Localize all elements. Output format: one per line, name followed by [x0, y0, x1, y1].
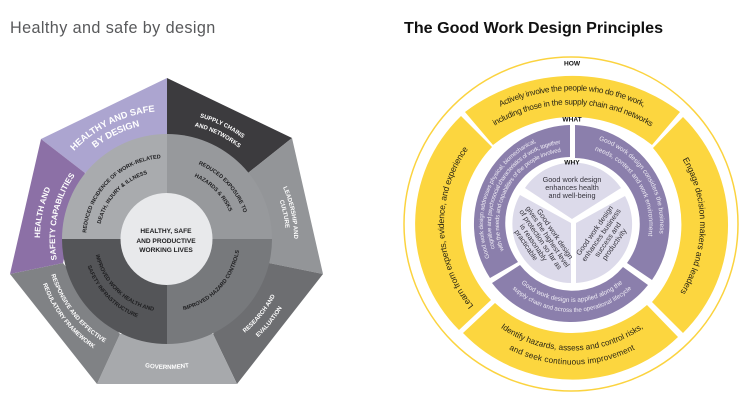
ring quadrant: improved work health and safety infrastructure: SAFETY INFRASTRUCTURE	[88, 265, 138, 318]
lilac sector: business success: productivity	[600, 226, 629, 262]
ring quadrant: improved hazard controls: IMPROVED HAZARD CONTROLS	[182, 250, 239, 310]
heptagon diagram: healthy and safe by design	[10, 78, 323, 384]
ring quadrant: improved hazard controls	[167, 239, 272, 344]
yellow segment: actively involve: including those in the supply chain and networks	[492, 98, 652, 126]
yellow segment: engage decision makers	[652, 117, 728, 333]
circular diagram: good work design principles	[403, 56, 739, 392]
lilac sector: highest level of protection: Good work design	[535, 207, 575, 261]
ring quadrant: reduced exposure: REDUCED EXPOSURE TO	[198, 161, 247, 212]
yellow segment: identify hazards: and seek continuous improvement	[510, 345, 635, 365]
label: why: WHY	[564, 160, 580, 166]
lilac sector: health and well-being	[525, 163, 621, 219]
yellow segment: learn from experts: Learn from experts, evidence, and experience	[438, 148, 474, 309]
lilac sector: highest level of protection: of protection so far as	[517, 208, 564, 271]
yellow segment: actively involve: Actively involve the people who do the work,	[500, 84, 644, 108]
ring quadrant: improved work health and safety infrastructure	[62, 239, 167, 344]
yellow segment: identify hazards: Identify hazards, assess and control risks,	[501, 324, 644, 350]
segment: research and evaluation	[213, 263, 323, 384]
purple segment: supply chain and lifecycle: Good work design is applied along the	[522, 280, 622, 303]
yellow segment: engage decision makers: Engage decision makers and leaders	[680, 157, 706, 294]
segment: healthy and safe by design: BY DESIGN	[92, 120, 140, 148]
segment: leadership and culture: LEADERSHIP AND	[283, 186, 298, 239]
lilac sector: highest level of protection: is reasonably	[518, 222, 550, 263]
segment: supply chains and networks: SUPPLY CHAINS	[200, 114, 244, 138]
ring quadrant: reduced incidence: DEATH, INJURY & ILLNESS	[97, 170, 147, 224]
lilac sector: highest level of protection: gives the highest level	[524, 204, 572, 269]
centre circle: healthy, safe and productive working lives: WORKING LIVES	[139, 247, 193, 254]
segment: supply chains and networks	[167, 78, 292, 173]
ring quadrant: reduced incidence	[62, 134, 167, 239]
centre circle: healthy, safe and productive working lives	[120, 193, 212, 285]
purple segment: business needs: Good work design considers the business	[600, 136, 665, 234]
yellow segment: identify hazards	[463, 303, 678, 380]
purple segment: supply chain and lifecycle	[492, 265, 648, 322]
segment: health and safety capabilities: SAFETY CAPABILITIES	[50, 173, 74, 260]
ring quadrant: improved work health and safety infrastructure: IMPROVED WORK HEALTH AND	[96, 254, 154, 310]
segment: leadership and culture	[248, 138, 323, 274]
lilac sector: health and well-being: and well-being	[548, 191, 596, 200]
lilac sector: business success	[573, 196, 636, 283]
purple segment: physical and psychosocial: cognitive and psychosocial characteristics of work, together	[486, 140, 560, 249]
title: The Good Work Design Principles: The Good Work Design Principles	[404, 19, 663, 37]
purple segment: business needs	[575, 125, 670, 280]
ring quadrant: reduced incidence: REDUCED INCIDENCE OF WORK-RELATED	[82, 154, 160, 232]
ring quadrant: reduced exposure	[167, 134, 264, 239]
lilac sector: business success: enhances business	[580, 207, 623, 263]
segment: healthy and safe by design	[41, 78, 167, 173]
segment: health and safety capabilities: HEALTH AND	[34, 187, 50, 238]
ring quadrant: reduced exposure: HAZARDS & RISKS	[194, 173, 232, 212]
purple segment: physical and psychosocial: Good work design addresses physical, biomechanical,	[478, 139, 536, 258]
yellow segment: actively involve	[465, 76, 680, 145]
segment: leadership and culture: CULTURE	[280, 200, 290, 228]
purple segment: physical and psychosocial	[474, 125, 570, 278]
segment: health and safety capabilities	[10, 139, 85, 274]
lilac sector: business success: success and	[592, 220, 623, 259]
segment: healthy and safe by design: HEALTHY AND SAFE	[70, 105, 154, 150]
segment: research and evaluation: RESEARCH AND	[242, 294, 274, 333]
centre circle: healthy, safe and productive working lives: AND PRODUCTIVE	[136, 238, 196, 245]
centre circle: healthy, safe and productive working lives: HEALTHY, SAFE	[140, 228, 192, 235]
lilac sector: business success: Good work design	[574, 204, 615, 257]
outer ring outline	[404, 57, 738, 391]
purple segment: business needs: needs, context and work environment	[595, 147, 653, 236]
segment: responsive and effective regulatory framework: RESPONSIVE AND EFFECTIVE	[51, 274, 106, 342]
lilac sector: health and well-being: Good work design	[543, 175, 601, 184]
segment: research and evaluation: EVALUATION	[256, 306, 282, 337]
segment: responsive and effective regulatory framework: REGULATORY FRAMEWORK	[43, 282, 96, 348]
lilac sector: highest level of protection: practicable	[513, 228, 540, 262]
lilac sector: highest level of protection	[505, 195, 578, 283]
label: how: HOW	[564, 60, 581, 68]
segment: supply chains and networks: AND NETWORKS	[194, 122, 241, 148]
lilac sector: health and well-being: enhances health	[545, 183, 599, 192]
segment: responsive and effective regulatory framework	[10, 263, 120, 384]
purple segment: physical and psychosocial: with the needs and capabilities of the people involved	[494, 148, 561, 252]
title: Healthy and safe by design: Healthy and safe by design	[10, 19, 216, 37]
purple segment: supply chain and lifecycle: supply chain and across the operational lifecycle	[512, 286, 631, 312]
yellow segment: learn from experts	[415, 116, 492, 330]
segment: government: GOVERNMENT	[145, 363, 188, 370]
segment: government	[97, 334, 237, 384]
label: what: WHAT	[562, 116, 582, 124]
